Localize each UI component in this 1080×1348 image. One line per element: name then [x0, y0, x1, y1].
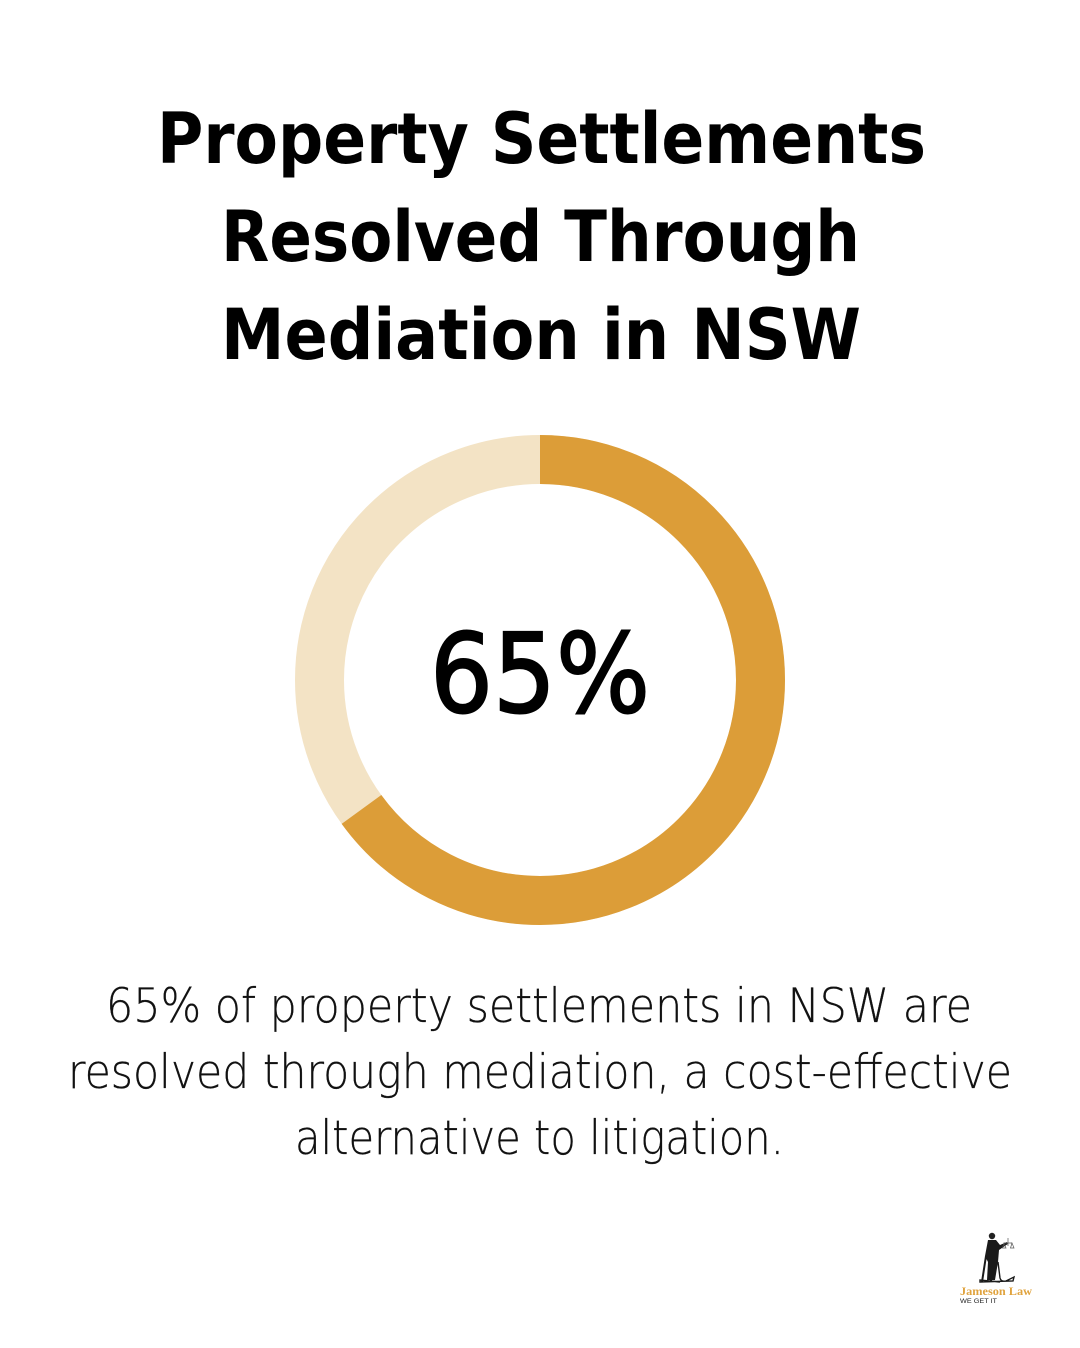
description text — [68, 979, 1012, 1166]
title: Mediation in NSW — [221, 294, 861, 376]
title: Property Settlements — [157, 98, 926, 180]
icon: lady justice and L monogram — [980, 1233, 1014, 1282]
donut value: 65% — [430, 610, 650, 738]
description text: resolved through mediation, a cost-effective — [68, 1045, 1012, 1100]
donut chart: 65% — [320, 460, 760, 900]
title — [157, 98, 926, 376]
description text: alternative to litigation. — [295, 1111, 784, 1166]
title: Resolved Through — [221, 196, 860, 278]
logo tagline: WE GET IT — [960, 1298, 997, 1305]
description text: 65% of property settlements in NSW are — [106, 979, 972, 1034]
logo: Jameson Law — [960, 1233, 1033, 1305]
logo name: Jameson Law — [960, 1286, 1033, 1298]
